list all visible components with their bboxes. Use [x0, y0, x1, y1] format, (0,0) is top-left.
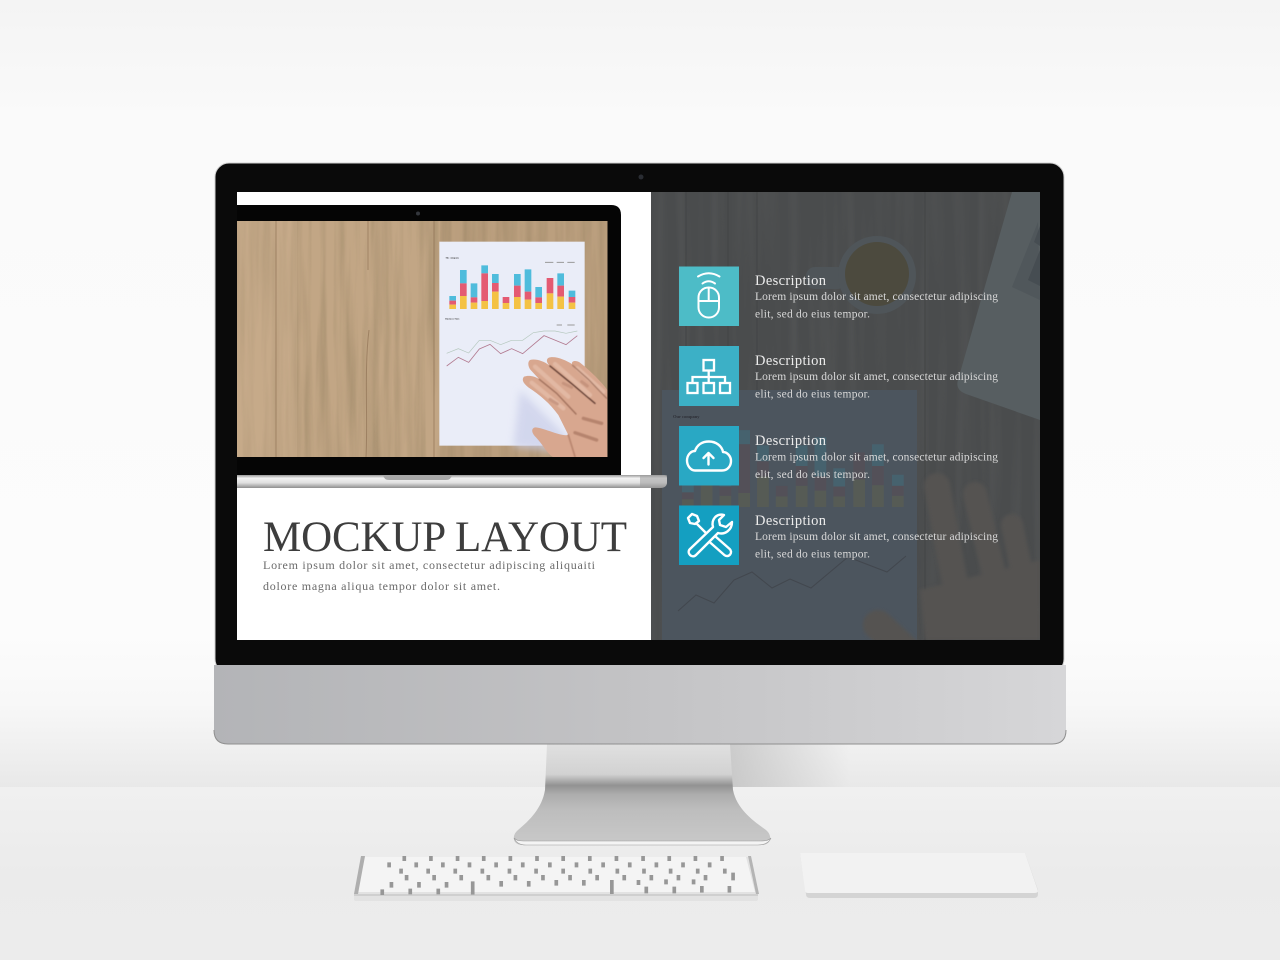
- stacked bar chart: [445, 256, 575, 309]
- line chart: Business Stats: [445, 317, 459, 320]
- laptop screen photo: wood desk with report: [237, 221, 608, 457]
- laptop base: [237, 475, 667, 488]
- trackpad: [800, 853, 1038, 898]
- background report paper: Our company: [673, 414, 700, 419]
- background report paper: [662, 390, 917, 640]
- monitor chin: [214, 665, 1066, 744]
- item 1 body text: Lorem ipsum dolor sit amet, consectetur adipiscing: [755, 291, 998, 303]
- background coffee cup: [806, 236, 916, 314]
- item 3 body text: elit, sed do eius tempor.: [755, 469, 870, 481]
- stacked bar chart: The company: [445, 256, 460, 259]
- icon: wrench and screwdriver: [679, 506, 739, 565]
- item 4: tools icon and description: [679, 506, 998, 565]
- item 1: mouse icon and description: [679, 266, 998, 326]
- item 3 body text: [755, 452, 998, 481]
- icon: network hierarchy: [679, 346, 739, 406]
- monitor body: [214, 163, 1066, 744]
- item 1: mouse icon and description: Description: [755, 273, 827, 289]
- monitor stand: [514, 744, 771, 845]
- subtitle text: [263, 558, 596, 593]
- item 3: cloud icon and description: [679, 426, 998, 486]
- icon: cloud upload: [679, 426, 739, 486]
- item 4 body text: Lorem ipsum dolor sit amet, consectetur adipiscing: [755, 531, 998, 543]
- item 2 body text: elit, sed do eius tempor.: [755, 388, 870, 400]
- hand on paper: [513, 357, 607, 457]
- slide: right dark photo panel: [651, 192, 1040, 650]
- item 3 body text: Lorem ipsum dolor sit amet, consectetur adipiscing: [755, 452, 998, 464]
- item 4 body text: [755, 531, 998, 560]
- item 1 body text: elit, sed do eius tempor.: [755, 308, 870, 320]
- monitor camera: [638, 174, 644, 180]
- background laptop: [957, 192, 1040, 420]
- slide: left white panel: [237, 192, 651, 640]
- item 4 body text: elit, sed do eius tempor.: [755, 548, 870, 560]
- item 2 body text: [755, 371, 998, 400]
- item 2: network icon and description: Description: [755, 353, 827, 369]
- background hand: [878, 486, 1040, 650]
- keyboard: [354, 856, 759, 901]
- subtitle text: dolore magna aliqua tempor dolor sit amet.: [263, 579, 500, 593]
- item 1 body text: [755, 291, 998, 320]
- item 4: tools icon and description: Description: [755, 513, 827, 529]
- item 2: network icon and description: [679, 346, 998, 406]
- title: MOCKUP LAYOUT: [263, 514, 627, 561]
- icon: wireless mouse: [679, 266, 739, 326]
- laptop mockup: [237, 205, 621, 475]
- item 3: cloud icon and description: Description: [755, 433, 827, 449]
- line chart: [445, 317, 577, 366]
- item 2 body text: Lorem ipsum dolor sit amet, consectetur adipiscing: [755, 371, 998, 383]
- report paper: [439, 242, 585, 446]
- subtitle text: Lorem ipsum dolor sit amet, consectetur adipiscing aliquaiti: [263, 558, 596, 572]
- laptop camera: [416, 212, 420, 216]
